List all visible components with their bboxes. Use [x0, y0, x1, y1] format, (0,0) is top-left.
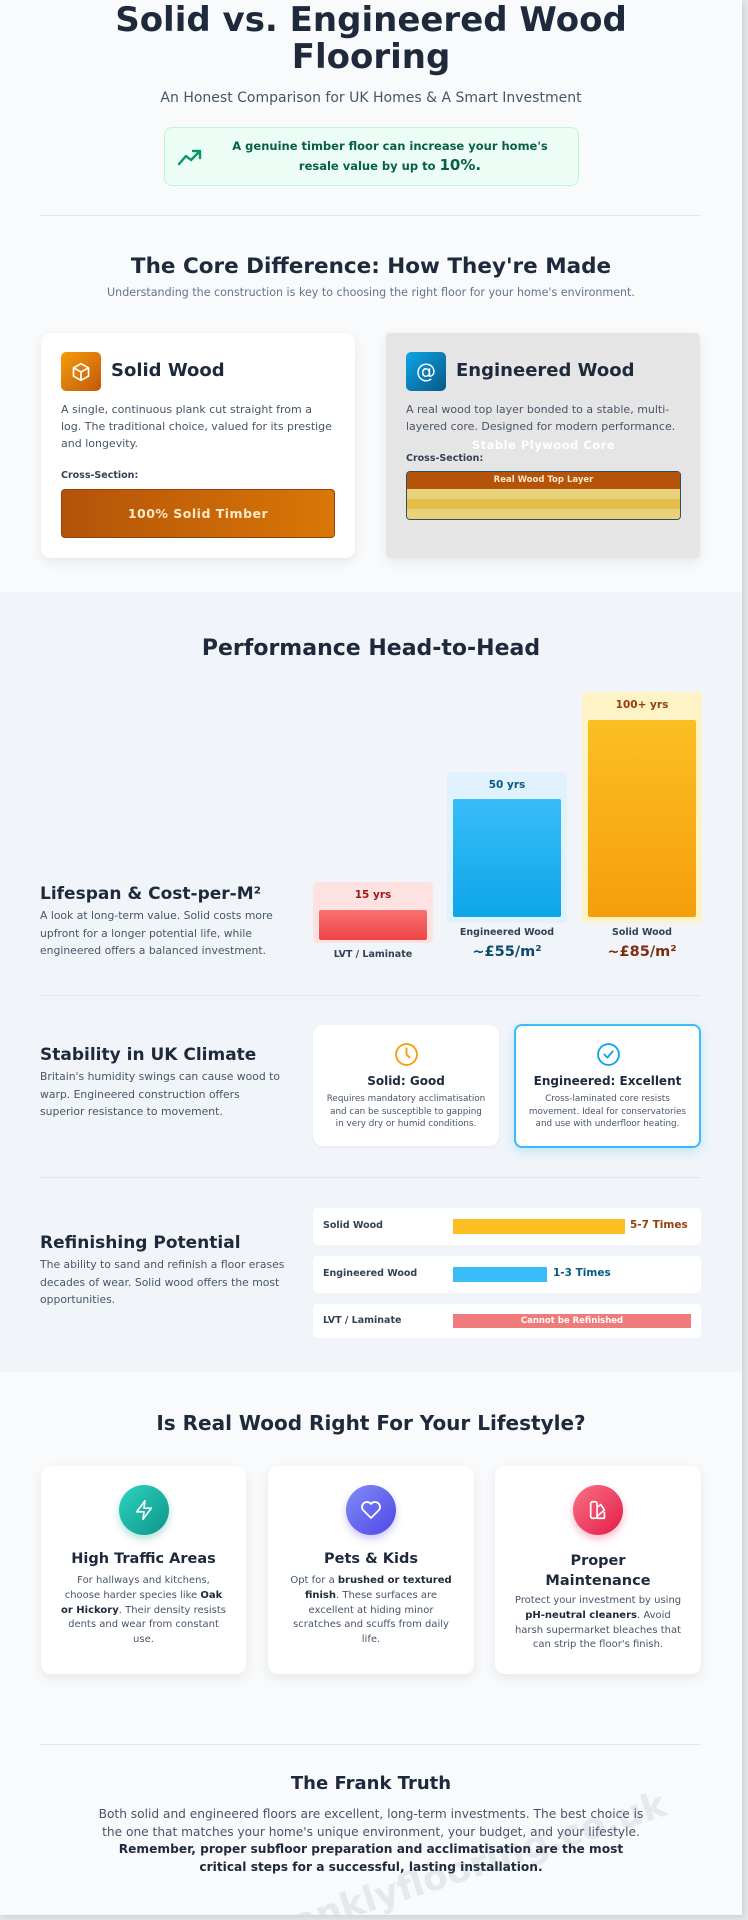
icon: layers: [406, 352, 446, 391]
text: refinishing: [40, 1233, 284, 1306]
card: engineered stability: Engineered: Excellent: [534, 1074, 681, 1088]
row: engineered: 1-3 Times: [553, 1267, 611, 1279]
text: lifespan: Lifespan & Cost-per-M²: [40, 884, 261, 904]
card: pets & kids: Opt for a brushed or textured finish. These surfaces are excellent at hiding minor scratches and scuffs from daily life.: [290, 1575, 452, 1645]
row: solid: [313, 1208, 701, 1245]
bar chart: lifespan: ~£85/m²: [607, 944, 677, 960]
card: pets & kids: Pets & Kids: [324, 1551, 418, 1567]
callout: resale value: [164, 127, 579, 186]
callout text: A genuine timber floor can increase your home's: [232, 139, 548, 153]
subheading: Understanding the construction is key to choosing the right floor for your home's environment.: [107, 286, 635, 299]
icon: layers: @: [416, 359, 436, 383]
callout text: [232, 139, 548, 174]
cross-section bar: 100% Solid Timber: [128, 506, 268, 521]
heading: core difference: The Core Difference: How They're Made: [131, 254, 611, 279]
title: Flooring: [292, 37, 450, 77]
card: solid stability: Requires mandatory acclimatisation and can be susceptible to gapping in very dry or humid conditions.: [327, 1094, 485, 1129]
cross-section bar: [61, 489, 335, 538]
bar chart: refinishing: [313, 1208, 701, 1338]
description: A real wood top layer bonded to a stable, multi-layered core. Designed for modern performance.: [406, 403, 675, 433]
row: solid: 5-7 Times: [630, 1219, 688, 1231]
icon: clock: [395, 1043, 418, 1066]
bar chart: lifespan: [313, 692, 702, 960]
text: refinishing: Refinishing Potential: [40, 1233, 241, 1253]
icon: check: [597, 1043, 620, 1066]
text: lifespan: A look at long-term value. Solid costs more upfront for a longer potential life, while engineered offers a balanced investment.: [40, 909, 273, 957]
bar chart: lifespan: Engineered Wood: [460, 927, 554, 938]
row: LVT: LVT / Laminate: [323, 1315, 401, 1326]
card: pets & kids: [268, 1466, 474, 1674]
card: high traffic: [41, 1466, 246, 1674]
subtitle: An Honest Comparison for UK Homes & A Smart Investment: [160, 90, 582, 106]
row: engineered: [313, 1256, 701, 1293]
text: stability: [40, 1045, 280, 1118]
row: solid: Solid Wood: [323, 1220, 383, 1231]
heading: Solid Wood: [111, 360, 225, 381]
icon: bolt: [119, 1485, 169, 1535]
heading: frank truth: The Frank Truth: [291, 1773, 451, 1794]
bar: LVT: 15 yrs: [355, 889, 391, 901]
row: LVT: [313, 1304, 701, 1338]
bar: engineered: [447, 772, 567, 923]
text: lifespan: [40, 884, 273, 957]
text: stability: Britain's humidity swings can cause wood to warp. Engineered construction offers superior resistance to movement.: [40, 1070, 280, 1118]
row: LVT: Cannot be Refinished: [521, 1316, 623, 1326]
bar chart: lifespan: LVT / Laminate: [334, 949, 412, 960]
bar: engineered: 50 yrs: [489, 779, 525, 791]
card: maintenance: [495, 1466, 701, 1674]
card: maintenance: Protect your investment by using pH-neutral cleaners. Avoid harsh supermarket bleaches that can strip the floor's finish.: [515, 1595, 681, 1650]
card: high traffic: For hallways and kitchens, choose harder species like Oak or Hickory. Their density resists dents and wear from constant use.: [61, 1575, 226, 1645]
callout text: resale value by up to 10%.: [299, 156, 481, 174]
label: Cross-Section:: [61, 470, 138, 481]
text: conclusion: critical steps for a successful, lasting installation.: [199, 1860, 543, 1874]
description: A single, continuous plank cut straight from a log. The traditional choice, valued for its prestige and longevity.: [61, 403, 332, 450]
panel: solid wood: [41, 333, 355, 558]
icon: cube: [61, 352, 101, 391]
label: Cross-Section:: [406, 453, 483, 464]
section 3 background: [0, 1372, 742, 1915]
bar: LVT: [313, 882, 433, 943]
section 1 background: [0, 0, 742, 592]
cross-section layers: Real Wood Top Layer: [494, 475, 593, 485]
overlay label: Stable Plywood Core: [472, 438, 615, 452]
cross-section layers: [406, 471, 681, 520]
card: solid stability: Solid: Good: [367, 1074, 445, 1088]
bar chart: lifespan: Solid Wood: [612, 927, 672, 938]
title: Solid vs. Engineered Wood: [115, 0, 627, 40]
card: solid stability: [313, 1025, 499, 1146]
icon: heart: [346, 1485, 396, 1535]
heading: performance: Performance Head-to-Head: [202, 636, 540, 661]
card: maintenance: Proper: [570, 1553, 626, 1569]
card: engineered stability: [514, 1024, 701, 1148]
text: refinishing: The ability to sand and refinish a floor erases decades of wear. Solid wood offers the most opportunities.: [40, 1258, 284, 1306]
text: stability: Stability in UK Climate: [40, 1045, 256, 1065]
icon: trending up: [178, 150, 202, 166]
title: [115, 0, 627, 77]
bar: solid: [582, 692, 702, 923]
card: high traffic: High Traffic Areas: [71, 1551, 216, 1567]
row: engineered: Engineered Wood: [323, 1268, 417, 1279]
card: engineered stability: Cross-laminated core resists movement. Ideal for conservatories and use with underfloor heating.: [529, 1094, 686, 1129]
heading: lifestyle: Is Real Wood Right For Your Lifestyle?: [156, 1411, 586, 1435]
bar chart: lifespan: ~£55/m²: [472, 944, 542, 960]
card: maintenance: Maintenance: [545, 1573, 651, 1589]
icon: swatch: [573, 1485, 623, 1535]
panel: engineered wood: [386, 333, 700, 558]
bar: solid: 100+ yrs: [616, 699, 668, 711]
text: conclusion: Both solid and engineered floors are excellent, long-term investments. The best choice is the one that matches your home's unique environment, your budget, and your lifestyle. Remember, proper subfloor preparation and acclimatisation are the most: [99, 1807, 643, 1856]
heading: Engineered Wood: [456, 360, 634, 381]
section 2 background: [0, 592, 742, 1372]
